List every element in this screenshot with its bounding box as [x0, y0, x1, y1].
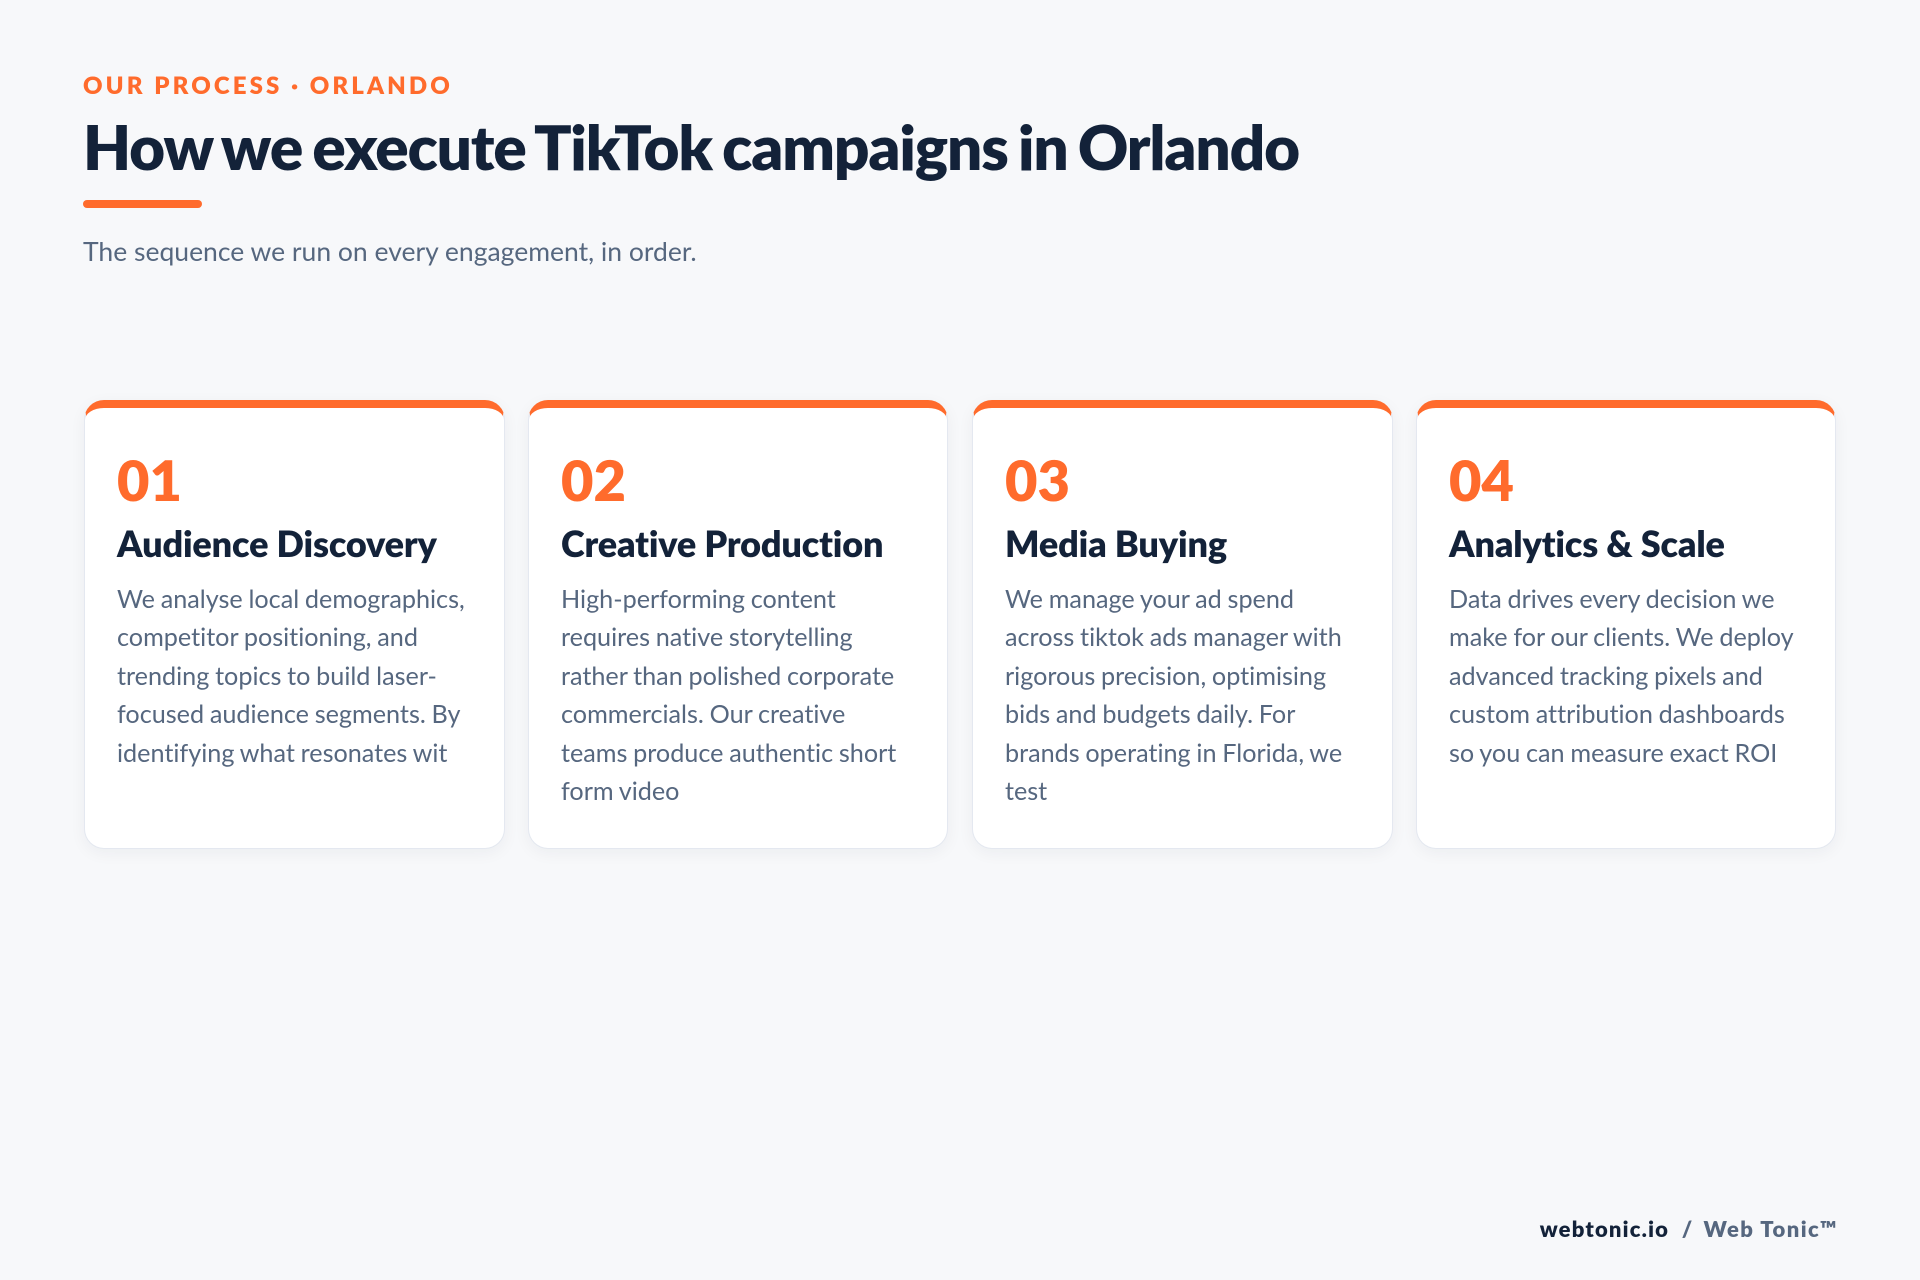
step description: bids and budgets daily. For: [1005, 699, 1295, 729]
step description: test: [1005, 776, 1047, 806]
step heading: Creative Production: [561, 521, 883, 565]
title accent rule: [83, 200, 202, 208]
step description: [1449, 584, 1794, 768]
step description: focused audience segments. By: [117, 699, 461, 729]
step description: identifying what resonates wit: [117, 738, 447, 768]
step description: competitor positioning, and: [117, 622, 418, 652]
step number 01: 01: [117, 446, 182, 513]
step description: requires native storytelling: [561, 622, 853, 652]
step description: trending topics to build laser-: [117, 661, 437, 691]
step description: [1005, 584, 1342, 806]
panel: step 02: [528, 400, 948, 849]
panel: step 04: [1416, 400, 1836, 849]
step description: Data drives every decision we: [1449, 584, 1775, 614]
step description: We analyse local demographics,: [117, 584, 465, 614]
step description: form video: [561, 776, 679, 806]
step description: make for our clients. We deploy: [1449, 622, 1794, 652]
step heading: Analytics & Scale: [1449, 521, 1725, 565]
step description: rather than polished corporate: [561, 661, 894, 691]
step number 03: 03: [1005, 446, 1070, 513]
step description: so you can measure exact ROI: [1449, 738, 1777, 768]
step description: across tiktok ads manager with: [1005, 622, 1342, 652]
eyebrow: OUR PROCESS · ORLANDO: [83, 71, 453, 100]
subtitle: The sequence we run on every engagement, in order.: [83, 235, 697, 267]
step description: High-performing content: [561, 584, 836, 614]
footer brand line: webtonic.io / Web Tonic™: [1540, 1215, 1838, 1242]
step description: [561, 584, 896, 806]
title: How we execute TikTok campaigns in Orlando: [83, 110, 1299, 184]
step description: commercials. Our creative: [561, 699, 845, 729]
step heading: Media Buying: [1005, 521, 1227, 565]
step number 02: 02: [561, 446, 626, 513]
step description: brands operating in Florida, we: [1005, 738, 1342, 768]
step description: advanced tracking pixels and: [1449, 661, 1763, 691]
step number 04: 04: [1449, 446, 1514, 513]
step heading: Audience Discovery: [117, 521, 437, 565]
step description: teams produce authentic short: [561, 738, 896, 768]
step description: rigorous precision, optimising: [1005, 661, 1326, 691]
panel: step 01: [84, 400, 505, 849]
step description: [117, 584, 465, 768]
step description: custom attribution dashboards: [1449, 699, 1785, 729]
panel: step 03: [972, 400, 1393, 849]
step description: We manage your ad spend: [1005, 584, 1294, 614]
